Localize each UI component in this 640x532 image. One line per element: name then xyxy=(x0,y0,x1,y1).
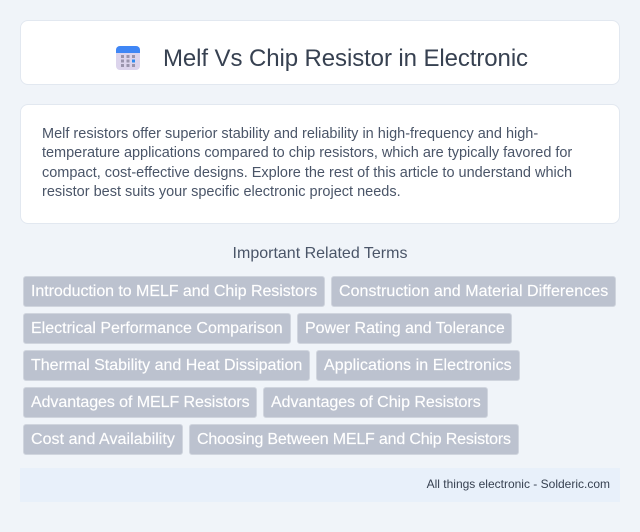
chip xyxy=(263,387,488,418)
icon: calendar grid xyxy=(116,46,140,70)
header panel xyxy=(20,20,620,85)
chip: Power Rating and Tolerance xyxy=(305,320,505,337)
chip xyxy=(23,313,291,344)
chip: Introduction to MELF and Chip Resistors xyxy=(31,283,317,300)
chip: Advantages of Chip Resistors xyxy=(271,394,481,411)
footer bar xyxy=(20,468,620,502)
chip xyxy=(23,387,257,418)
intro text: Melf resistors offer superior stability and reliability in high-frequency and high- xyxy=(42,126,538,142)
chip xyxy=(189,424,519,455)
intro panel xyxy=(20,104,620,224)
intro text: compact, cost-effective designs. Explore the rest of this article to understand which xyxy=(42,165,572,181)
chip xyxy=(297,313,512,344)
intro text: temperature applications compared to chip resistors, which are typically favored for xyxy=(42,145,572,161)
chip list xyxy=(23,276,616,455)
chip: Advantages of MELF Resistors xyxy=(31,394,250,411)
chip xyxy=(23,350,310,381)
chip: Electrical Performance Comparison xyxy=(31,320,283,337)
intro text xyxy=(42,126,572,200)
chip xyxy=(316,350,520,381)
chip: Thermal Stability and Heat Dissipation xyxy=(31,357,302,374)
heading: related terms: Important Related Terms xyxy=(233,245,407,262)
footer credit: All things electronic - Solderic.com xyxy=(427,477,610,491)
chip: Choosing Between MELF and Chip Resistors xyxy=(197,431,511,448)
chip xyxy=(23,276,325,307)
chip xyxy=(331,276,616,307)
chip: Cost and Availability xyxy=(31,431,175,448)
chip: Construction and Material Differences xyxy=(339,283,608,300)
chip xyxy=(23,424,183,455)
intro text: resistor best suits your specific electronic project needs. xyxy=(42,184,401,200)
title: Melf Vs Chip Resistor in Electronic xyxy=(163,45,528,72)
chip: Applications in Electronics xyxy=(324,357,512,374)
